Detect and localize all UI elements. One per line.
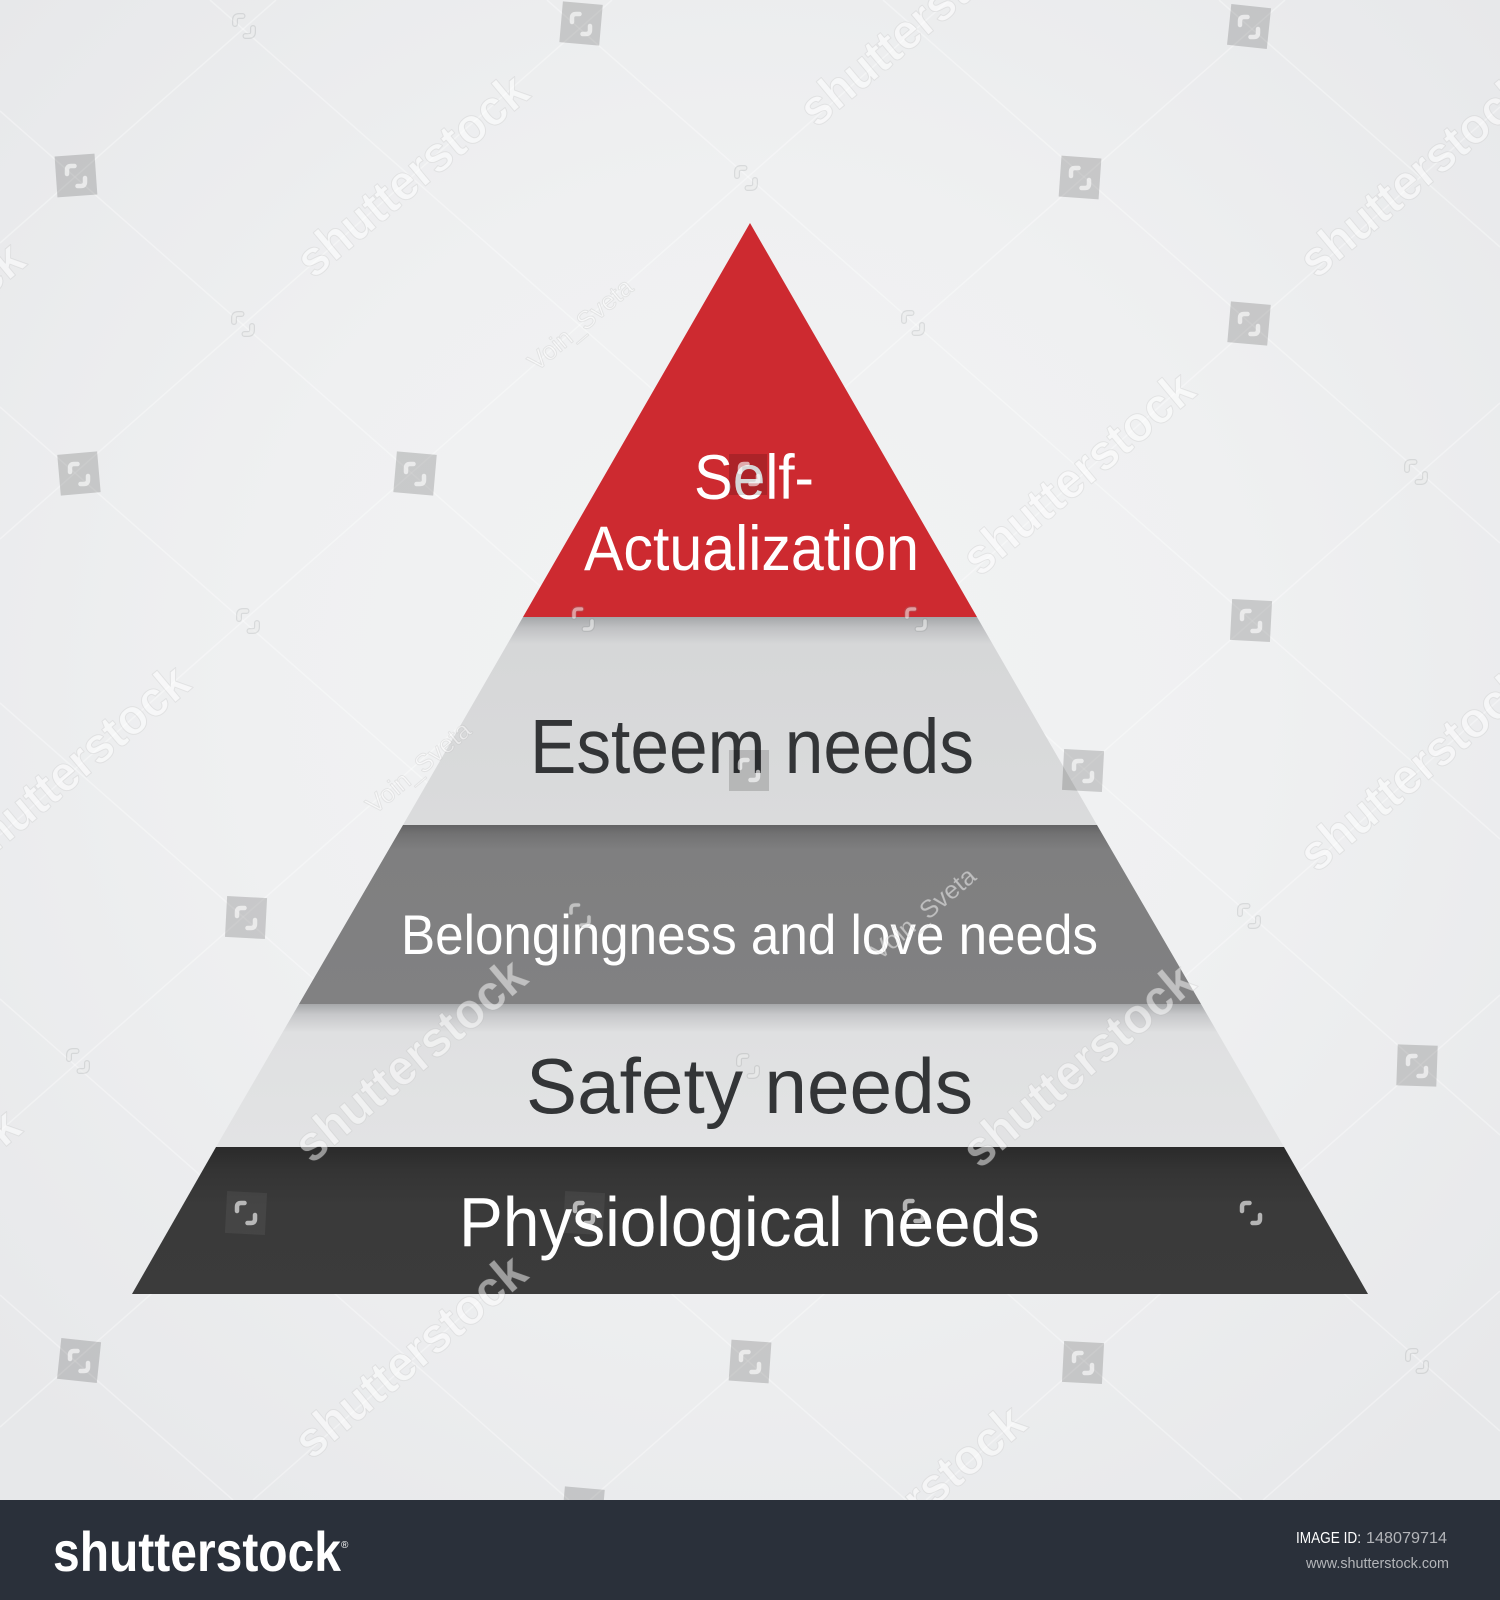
- level: self-actualization: [523, 223, 977, 617]
- level: safety needs: [216, 1004, 1284, 1147]
- footer logo: shutterstock: [53, 1520, 342, 1583]
- footer image id: 148079714: [1366, 1530, 1447, 1547]
- watermark text: shutterstock: [283, 947, 537, 1173]
- label: Self-Actualization: [584, 443, 919, 584]
- watermark text: shutterstock: [285, 62, 539, 288]
- pyramid labels: [401, 443, 1098, 1261]
- watermark text: Voin_Sveta: [361, 716, 477, 820]
- footer bar: [0, 1500, 1500, 1600]
- watermark text: Voin_Sveta: [866, 862, 982, 966]
- footer image id: [1296, 1530, 1447, 1547]
- level: belongingness and love needs: [299, 825, 1201, 1004]
- watermark text: shutterstock: [951, 952, 1205, 1178]
- label: Physiological needs: Physiological needs: [459, 1183, 1040, 1261]
- footer image id: IMAGE ID:: [1296, 1530, 1361, 1547]
- label: Self-Actualization: Actualization: [584, 514, 919, 584]
- watermark text: shutterstock: [283, 1243, 537, 1469]
- label: Self-Actualization: Self-: [694, 443, 814, 513]
- label: Safety needs: Safety needs: [526, 1042, 973, 1130]
- level: esteem needs: [403, 617, 1097, 825]
- footer url: www.shutterstock.com: [1305, 1555, 1449, 1572]
- level: physiological needs: [132, 1147, 1368, 1294]
- pyramid: [132, 223, 1368, 1294]
- footer logo: ®: [341, 1540, 349, 1551]
- label: Belongingness and love needs: Belongingness and love needs: [401, 903, 1098, 966]
- watermark text: Voin_Sveta: [523, 273, 639, 377]
- watermark text: shutterstock: [951, 360, 1205, 586]
- label: Esteem needs: Esteem needs: [530, 704, 974, 790]
